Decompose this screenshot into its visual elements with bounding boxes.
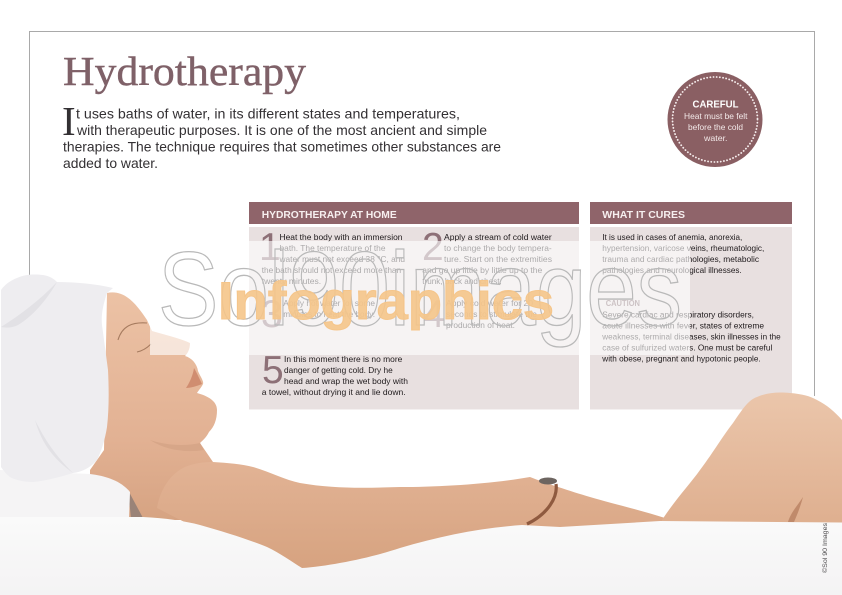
jaw shadow	[150, 440, 204, 451]
pillow	[0, 470, 130, 520]
bracelet charm	[539, 478, 557, 484]
step 2: Apply a stream of cold water	[444, 232, 552, 242]
step 4: production of heat.	[446, 320, 515, 330]
callout: careful: Heat must be felt	[684, 111, 748, 121]
lips	[186, 368, 202, 388]
step 3	[261, 293, 375, 336]
step 1: bath. The temperature of the	[280, 243, 386, 253]
text: conditions treated: It is used in cases of anemia, anorexia,	[602, 232, 742, 242]
text: caution: Severe cardiac and respiratory disorders,	[602, 310, 754, 320]
step 2	[422, 226, 552, 286]
text: caution: CAUTION	[606, 298, 640, 308]
text: conditions treated: pathologies and neurological illnesses.	[602, 265, 742, 275]
step 4	[423, 293, 537, 336]
step 3: 3	[261, 293, 283, 336]
intro text: t uses baths of water, in its different states and temperatures,	[76, 106, 460, 122]
step 5: a towel, without drying it and lie down.	[262, 387, 406, 397]
step 4: Apply cold water for 20	[446, 298, 533, 308]
page frame	[30, 32, 814, 396]
knee crease	[788, 497, 803, 522]
intro text: with therapeutic purposes. It is one of the most ancient and simple	[76, 122, 487, 138]
callout: careful: water.	[703, 133, 728, 143]
step 1: water must not exceed 38 °C, and	[279, 254, 405, 264]
step 2: 2	[422, 226, 444, 269]
head towel	[1, 274, 113, 482]
step 2: trunk, back and chest.	[422, 276, 502, 286]
panel heading: hydrotherapy at home: HYDROTHERAPY AT HOME	[262, 209, 397, 221]
step 1	[259, 226, 405, 286]
step 1: Heat the body with an immersion	[280, 232, 403, 242]
intro text: added to water.	[63, 155, 158, 171]
intro text	[62, 98, 501, 171]
photo: woman relaxing on towel	[0, 274, 842, 595]
step 5: 5	[262, 349, 284, 392]
closed eye and eyebrow	[118, 323, 151, 352]
text: conditions treated: hypertension, varicose veins, rheumatologic,	[602, 243, 764, 253]
step 5: head and wrap the wet body with	[284, 376, 408, 386]
panel heading: what it cures: WHAT IT CURES	[602, 209, 685, 221]
intro text: therapies. The technique requires that sometimes other substances are	[63, 138, 501, 154]
text: conditions treated: trauma and cardiac pathologies, metabolic	[602, 254, 760, 264]
text: caution: weakness, terminal diseases, skin illnesses in the	[601, 332, 781, 342]
callout: careful	[668, 72, 762, 167]
watermark: Sol90images: Sol90images	[158, 231, 682, 348]
bed towel	[0, 517, 842, 595]
panel: what it cures	[590, 202, 792, 410]
step 1: the bath should not exceed more than	[262, 265, 401, 275]
step 1: twenty minutes.	[262, 276, 321, 286]
towel fold	[1, 282, 73, 473]
step 3: Apply hot water for some	[283, 298, 375, 308]
step 2: and go up little by little up to the	[422, 265, 543, 275]
watermark: Infographics: Infographics	[218, 272, 554, 331]
head and neck	[90, 292, 240, 520]
step 2: ture. Start on the extremities	[444, 254, 552, 264]
text: caution: case of sulfurized waters. One must be careful	[602, 342, 772, 352]
callout: careful: before the cold	[688, 122, 743, 132]
text: caution	[601, 298, 781, 364]
step 5	[262, 349, 408, 397]
text: caution: with obese, pregnant and hypotonic people.	[601, 354, 761, 364]
arm and torso	[157, 462, 666, 572]
step 1: 1	[259, 226, 281, 269]
watermark band	[150, 241, 690, 355]
copyright: ©Sol 90 Images	[821, 522, 829, 573]
text: caution: acute illnesses with fever, states of extreme	[602, 320, 764, 330]
step 3: minutes to heat the body.	[283, 309, 375, 319]
text: conditions treated	[602, 232, 764, 275]
bracelet	[527, 484, 556, 524]
step 4: 4	[423, 293, 445, 336]
neck shadow behind shoulder	[128, 490, 143, 518]
thigh and knee	[662, 392, 842, 530]
step 5: In this moment there is no more	[284, 354, 403, 364]
callout: careful: CAREFUL	[692, 98, 739, 110]
panel: hydrotherapy at home	[249, 202, 579, 410]
step 4: seconds to stimulate the	[446, 309, 537, 319]
step 5: danger of getting cold. Dry he	[284, 365, 393, 375]
step 2: to change the body tempera-	[444, 243, 552, 253]
title: Hydrotherapy	[63, 48, 307, 94]
intro text: I	[62, 98, 76, 144]
